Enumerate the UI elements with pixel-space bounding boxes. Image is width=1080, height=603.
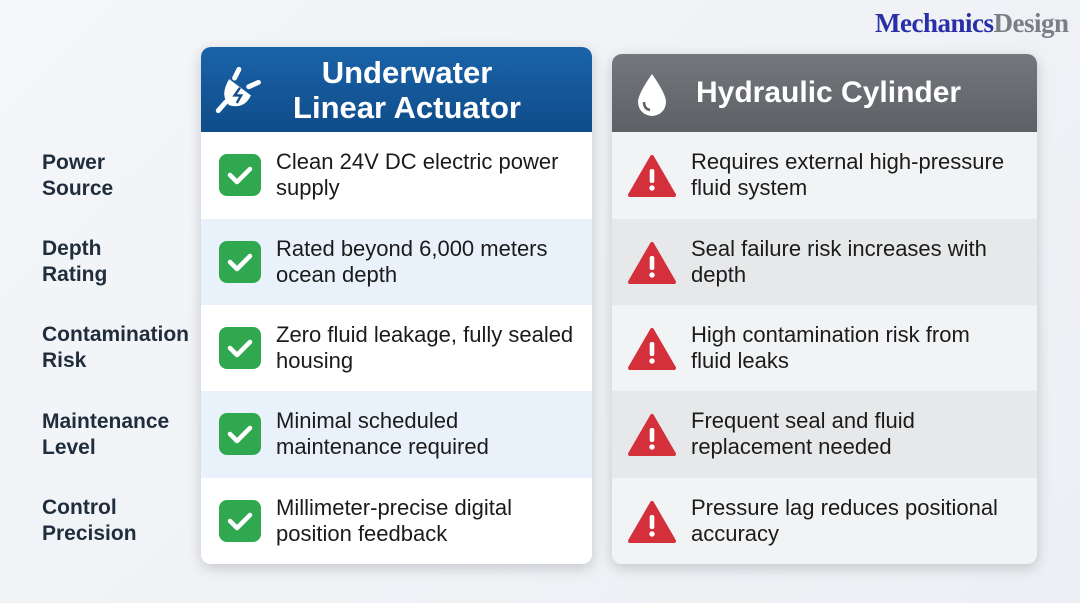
panel: underwater linear actuator: [201, 47, 592, 564]
label: power source: Power: [42, 151, 105, 174]
actuator rows: housing: [276, 348, 353, 373]
label: power source: [42, 151, 113, 200]
panel: hydraulic cylinder: [612, 54, 1037, 564]
header: actuator: [201, 47, 592, 132]
hydraulic rows: fluid leaks: [691, 348, 789, 373]
icon: drop: [638, 74, 666, 116]
label: depth rating: [42, 237, 107, 286]
label: depth rating: Depth: [42, 237, 102, 260]
label: maintenance level: Maintenance: [42, 410, 169, 433]
actuator rows: Millimeter-precise digital: [276, 495, 512, 520]
actuator rows: Minimal scheduled: [276, 408, 458, 433]
hydraulic rows: [612, 149, 1037, 546]
hydraulic rows: depth: [691, 262, 746, 287]
hydraulic rows: accuracy: [691, 521, 779, 546]
label: contamination risk: Risk: [42, 349, 86, 372]
actuator rows: [201, 149, 592, 564]
header title: Linear Actuator: [293, 90, 521, 125]
hydraulic rows: High contamination risk from: [691, 322, 970, 347]
hydraulic rows: fluid system: [691, 175, 807, 200]
actuator rows: Zero fluid leakage, fully sealed: [276, 322, 573, 347]
label: control precision: [42, 496, 137, 545]
actuator rows: Clean 24V DC electric power: [276, 149, 558, 174]
label: maintenance level: [42, 410, 169, 459]
label: depth rating: Rating: [42, 263, 107, 286]
label: control precision: Control: [42, 496, 117, 519]
header title: [293, 55, 521, 125]
header title: Hydraulic Cylinder: [696, 76, 961, 109]
header title: Underwater: [322, 55, 492, 90]
hydraulic rows: Frequent seal and fluid: [691, 408, 915, 433]
actuator rows: maintenance required: [276, 434, 489, 459]
actuator rows: supply: [276, 175, 340, 200]
header: hydraulic: [612, 54, 1037, 132]
label: power source: Source: [42, 177, 113, 200]
hydraulic rows: Seal failure risk increases with: [691, 236, 987, 261]
row labels: [42, 151, 189, 545]
hydraulic rows: Requires external high-pressure: [691, 149, 1004, 174]
label: contamination risk: Contamination: [42, 323, 189, 346]
hydraulic rows: Pressure lag reduces positional: [691, 495, 998, 520]
icon: plug: [216, 66, 261, 114]
label: contamination risk: [42, 323, 189, 372]
label: control precision: Precision: [42, 522, 137, 545]
label: maintenance level: Level: [42, 436, 96, 459]
logo: MechanicsDesign: [875, 8, 1068, 38]
actuator rows: position feedback: [276, 521, 447, 546]
actuator rows: ocean depth: [276, 262, 397, 287]
hydraulic rows: replacement needed: [691, 434, 892, 459]
actuator rows: Rated beyond 6,000 meters: [276, 236, 548, 261]
